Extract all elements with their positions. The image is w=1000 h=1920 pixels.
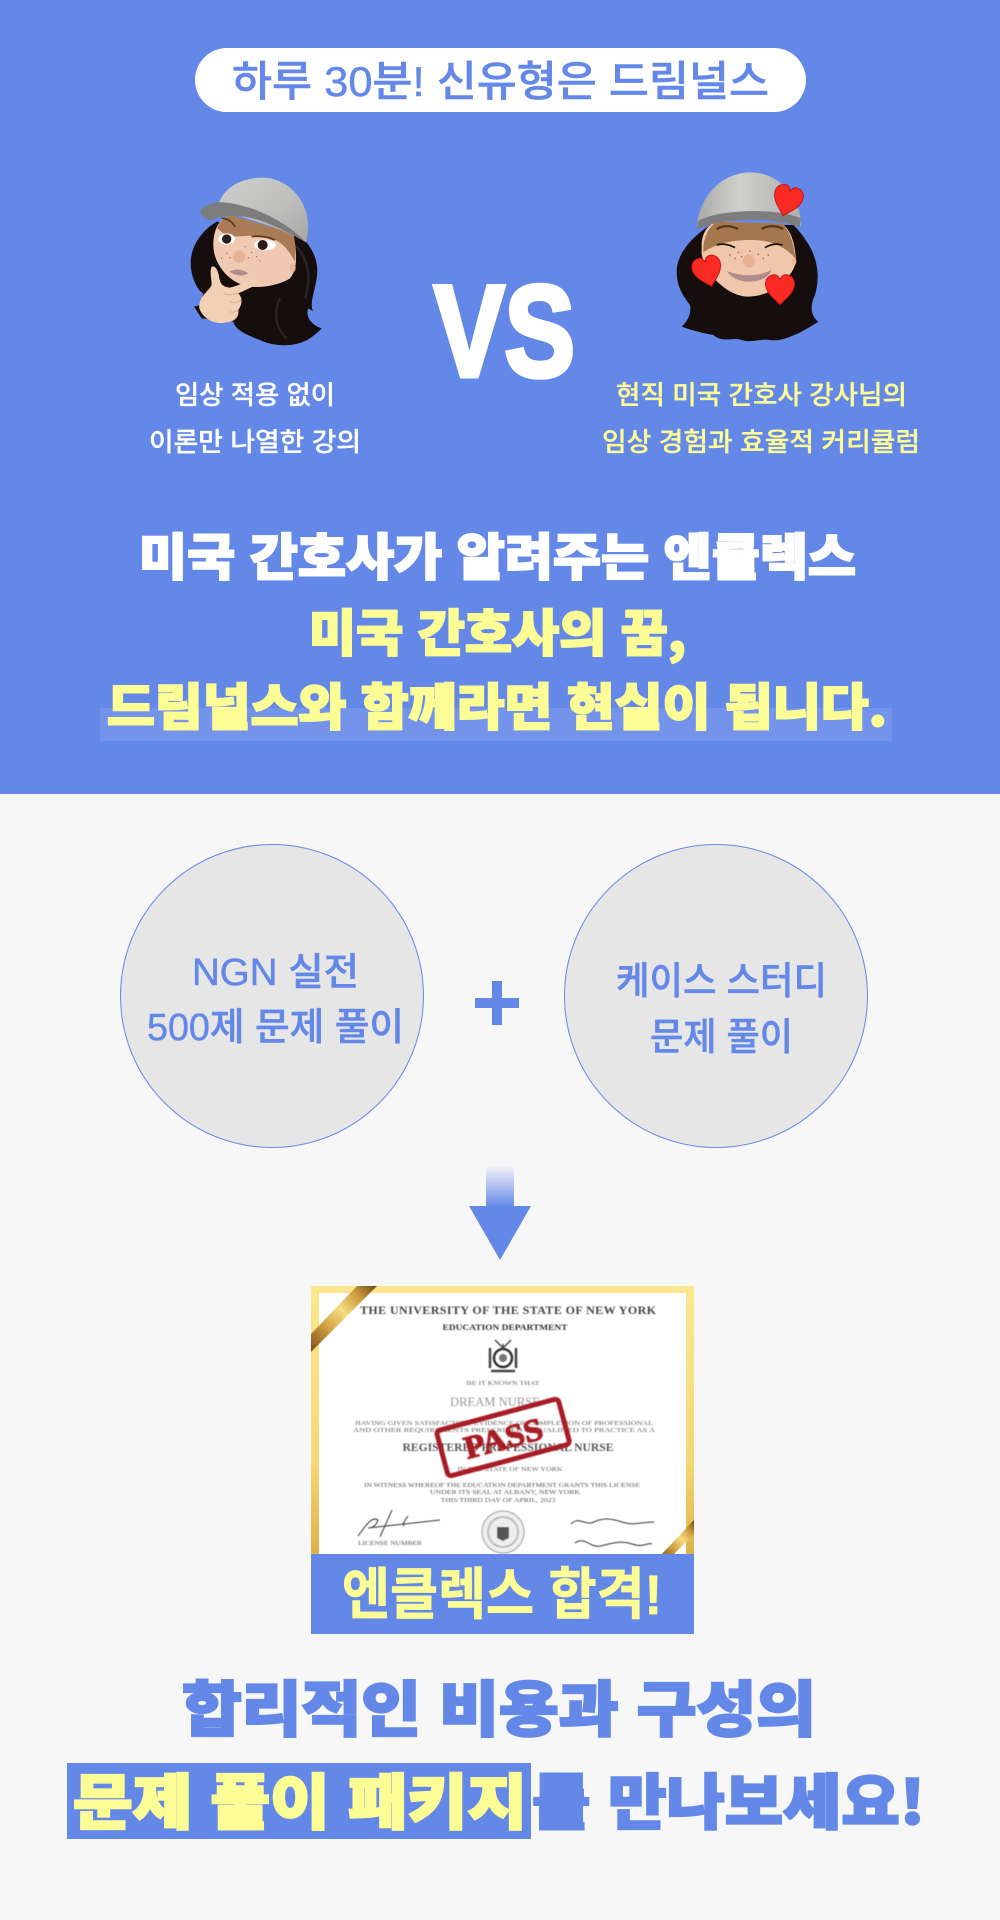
panel: NCLEX license certificate bbox=[311, 1286, 694, 1576]
signatures bbox=[358, 1510, 654, 1546]
circle: NGN problems: NGN 실전 bbox=[192, 952, 359, 994]
text block: right caption bbox=[602, 380, 920, 457]
certificate text: REGISTERED PROFESSIONAL NURSE bbox=[402, 1442, 614, 1454]
circle: case study problems: 케이스 스터디 bbox=[616, 961, 827, 1003]
header pill bbox=[195, 48, 806, 112]
VS label: VS bbox=[434, 258, 575, 404]
circle: case study problems bbox=[564, 844, 868, 1148]
certificate text: THE UNIVERSITY OF THE STATE OF NEW YORK bbox=[360, 1303, 657, 1317]
icon: state crest bbox=[490, 1340, 516, 1371]
stamp: PASS: PASS bbox=[460, 1410, 547, 1466]
certificate text: HAVING GIVEN SATISFACTORY EVIDENCE OF COMPLETION OF PROFESSIONAL bbox=[355, 1420, 653, 1427]
icon: plus bbox=[475, 981, 519, 1025]
heading: main message: 미국 간호사의 꿈, bbox=[309, 594, 686, 666]
certificate text bbox=[353, 1303, 657, 1547]
certificate text: BE IT KNOWN THAT bbox=[466, 1381, 540, 1387]
text block: left caption bbox=[149, 380, 361, 457]
heading: closing message: 합리적인 비용과 구성의 bbox=[182, 1662, 816, 1749]
panel: blue comparison section bbox=[0, 0, 1000, 794]
icon: thinking memoji bbox=[191, 178, 322, 345]
certificate text: UNDER ITS SEAL AT ALBANY, NEW YORK bbox=[430, 1489, 580, 1496]
icon: smiling memoji with hearts bbox=[677, 172, 818, 341]
heading: main message bbox=[100, 518, 892, 741]
header pill: 하루 30분! 신유형은 드림널스 bbox=[232, 58, 769, 105]
certificate text: DREAM NURSE bbox=[450, 1394, 540, 1409]
text block: right caption: 현직 미국 간호사 강사님의 bbox=[616, 380, 907, 410]
certificate text: EDUCATION DEPARTMENT bbox=[442, 1323, 568, 1332]
banner: NCLEX pass: 엔클렉스 합격! bbox=[342, 1563, 662, 1626]
circle: case study problems: 문제 풀이 bbox=[650, 1017, 793, 1059]
heading: closing message bbox=[67, 1662, 925, 1842]
heading: closing message: 문제 풀이 패키지 bbox=[73, 1755, 527, 1842]
circle: NGN problems bbox=[120, 844, 424, 1148]
arrow: down bbox=[469, 1165, 531, 1260]
certificate text: IN THE STATE OF NEW YORK bbox=[458, 1466, 563, 1473]
stamp: PASS bbox=[436, 1398, 570, 1476]
text block: left caption: 임상 적용 없이 bbox=[175, 380, 335, 410]
ribbon: bottom-right corner bbox=[660, 1520, 694, 1556]
certificate text: IN WITNESS WHEREOF THE EDUCATION DEPARTMENT GRANTS THIS LICENSE bbox=[364, 1482, 640, 1489]
text block: right caption: 임상 경험과 효율적 커리큘럼 bbox=[602, 427, 920, 457]
heading: main message: 미국 간호사가 알려주는 엔클렉스 bbox=[139, 518, 856, 590]
icon: seal bbox=[482, 1511, 524, 1553]
text block: left caption: 이론만 나열한 강의 bbox=[149, 427, 361, 457]
certificate text: THIS THIRD DAY OF APRIL, 2023 bbox=[440, 1497, 556, 1504]
heading: main message: 드림널스와 함께라면 현실이 됩니다. bbox=[107, 668, 887, 740]
certificate text: LICENSE NUMBER bbox=[358, 1540, 423, 1547]
ribbon: top-left corner bbox=[311, 1286, 377, 1352]
heading: closing message: 를 만나보세요! bbox=[532, 1755, 925, 1842]
certificate text: AND OTHER REQUIREMENTS PRESCRIBED IS QUALIFIED TO PRACTICE AS A bbox=[353, 1427, 655, 1434]
circle: NGN problems: 500제 문제 풀이 bbox=[147, 1007, 404, 1049]
